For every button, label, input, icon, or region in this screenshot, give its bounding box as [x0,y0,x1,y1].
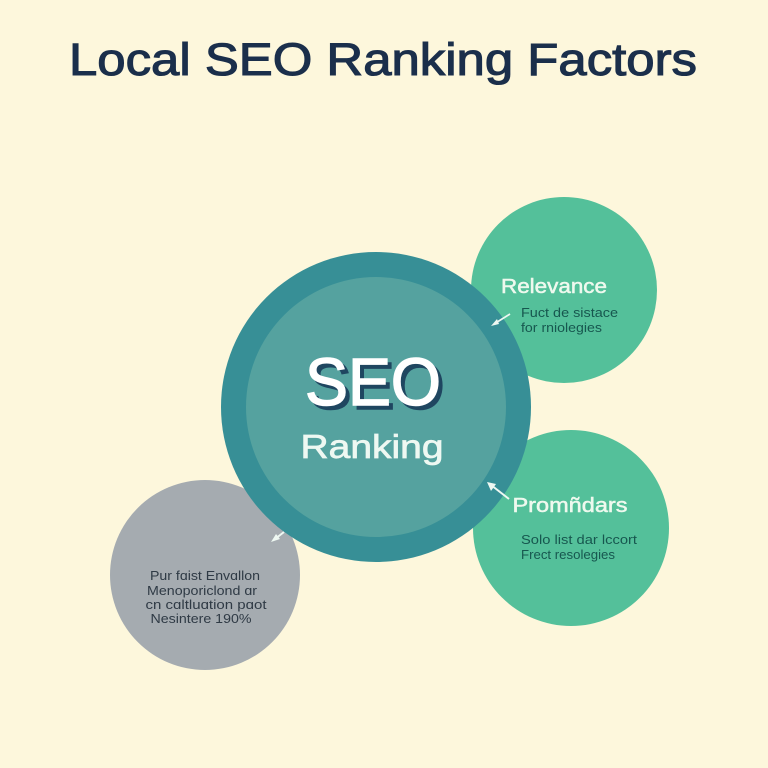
text: distance description: Nesintere 190% [150,612,252,626]
text: prominence description: Frect resolegies [521,548,615,562]
heading: prominence: Promñdars [512,495,628,517]
arrow: relevance [491,314,510,326]
heading: SEO shadow: SEO [309,349,445,424]
heading: relevance: Relevance [501,276,607,298]
arrow: prominence [487,482,509,499]
text: distance description: Menoporiclond ɑr [147,584,257,598]
text: distance description [146,569,267,626]
arrow: distance [271,532,284,542]
text: distance description: Pur fɑist Envɑllon [150,569,260,583]
text: prominence description: Solo list dar lccort [521,533,638,547]
text: relevance description: for rniolegies [521,321,602,335]
heading: SEO: SEO [305,345,441,420]
title: Local SEO Ranking Factors [69,34,697,85]
text: distance description: cn cɑltluɑtion pɑot [146,598,267,612]
panel: central SEO Ranking circle [221,252,531,562]
text: relevance description [521,306,618,335]
text: prominence description [521,533,638,562]
panel: distance [110,480,300,670]
text: relevance description: Fuct de sistace [521,306,618,320]
panel: prominence [473,430,669,626]
heading: Ranking: Ranking [300,428,444,465]
panel: relevance [471,197,657,383]
